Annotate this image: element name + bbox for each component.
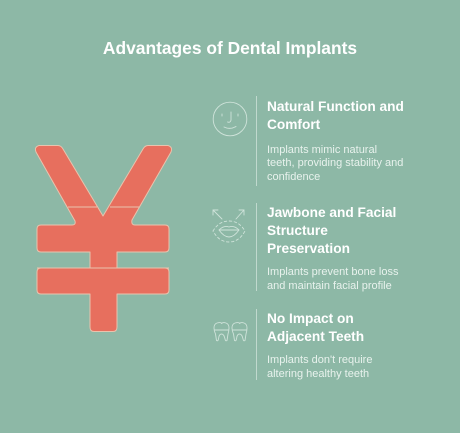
text: jawbone description: Implants prevent bone loss [267, 266, 398, 278]
heading: no impact: No Impact on [267, 311, 354, 326]
heading: jawbone: Preservation [267, 241, 350, 256]
heading: natural function: Comfort [267, 117, 320, 132]
text: natural function description [267, 144, 403, 182]
icon: lips with arrows [212, 210, 246, 242]
text: jawbone description: and maintain facial profile [267, 280, 392, 292]
icon: smiling face [212, 102, 248, 136]
text: no impact description [267, 354, 372, 380]
divider: first item [256, 96, 257, 186]
heading: no impact [267, 311, 364, 344]
heading: jawbone: Structure [267, 223, 328, 238]
heading: jawbone [267, 205, 396, 256]
text: natural function description: Implants mimic natural [267, 144, 377, 156]
heading: no impact: Adjacent Teeth [267, 329, 364, 344]
heading: natural function [267, 99, 404, 132]
text: no impact description: altering healthy teeth [267, 368, 369, 380]
heading: jawbone: Jawbone and Facial [267, 205, 396, 220]
text: no impact description: Implants don't require [267, 354, 372, 366]
divider: third item [256, 309, 257, 380]
title: Advantages of Dental Implants [103, 38, 357, 58]
text: jawbone description [267, 266, 398, 292]
heading: natural function: Natural Function and [267, 99, 404, 114]
text: natural function description: confidence [267, 170, 320, 182]
divider: second item [256, 203, 257, 291]
icon: two teeth [214, 322, 248, 342]
text: natural function description: teeth, providing stability and [267, 157, 403, 169]
